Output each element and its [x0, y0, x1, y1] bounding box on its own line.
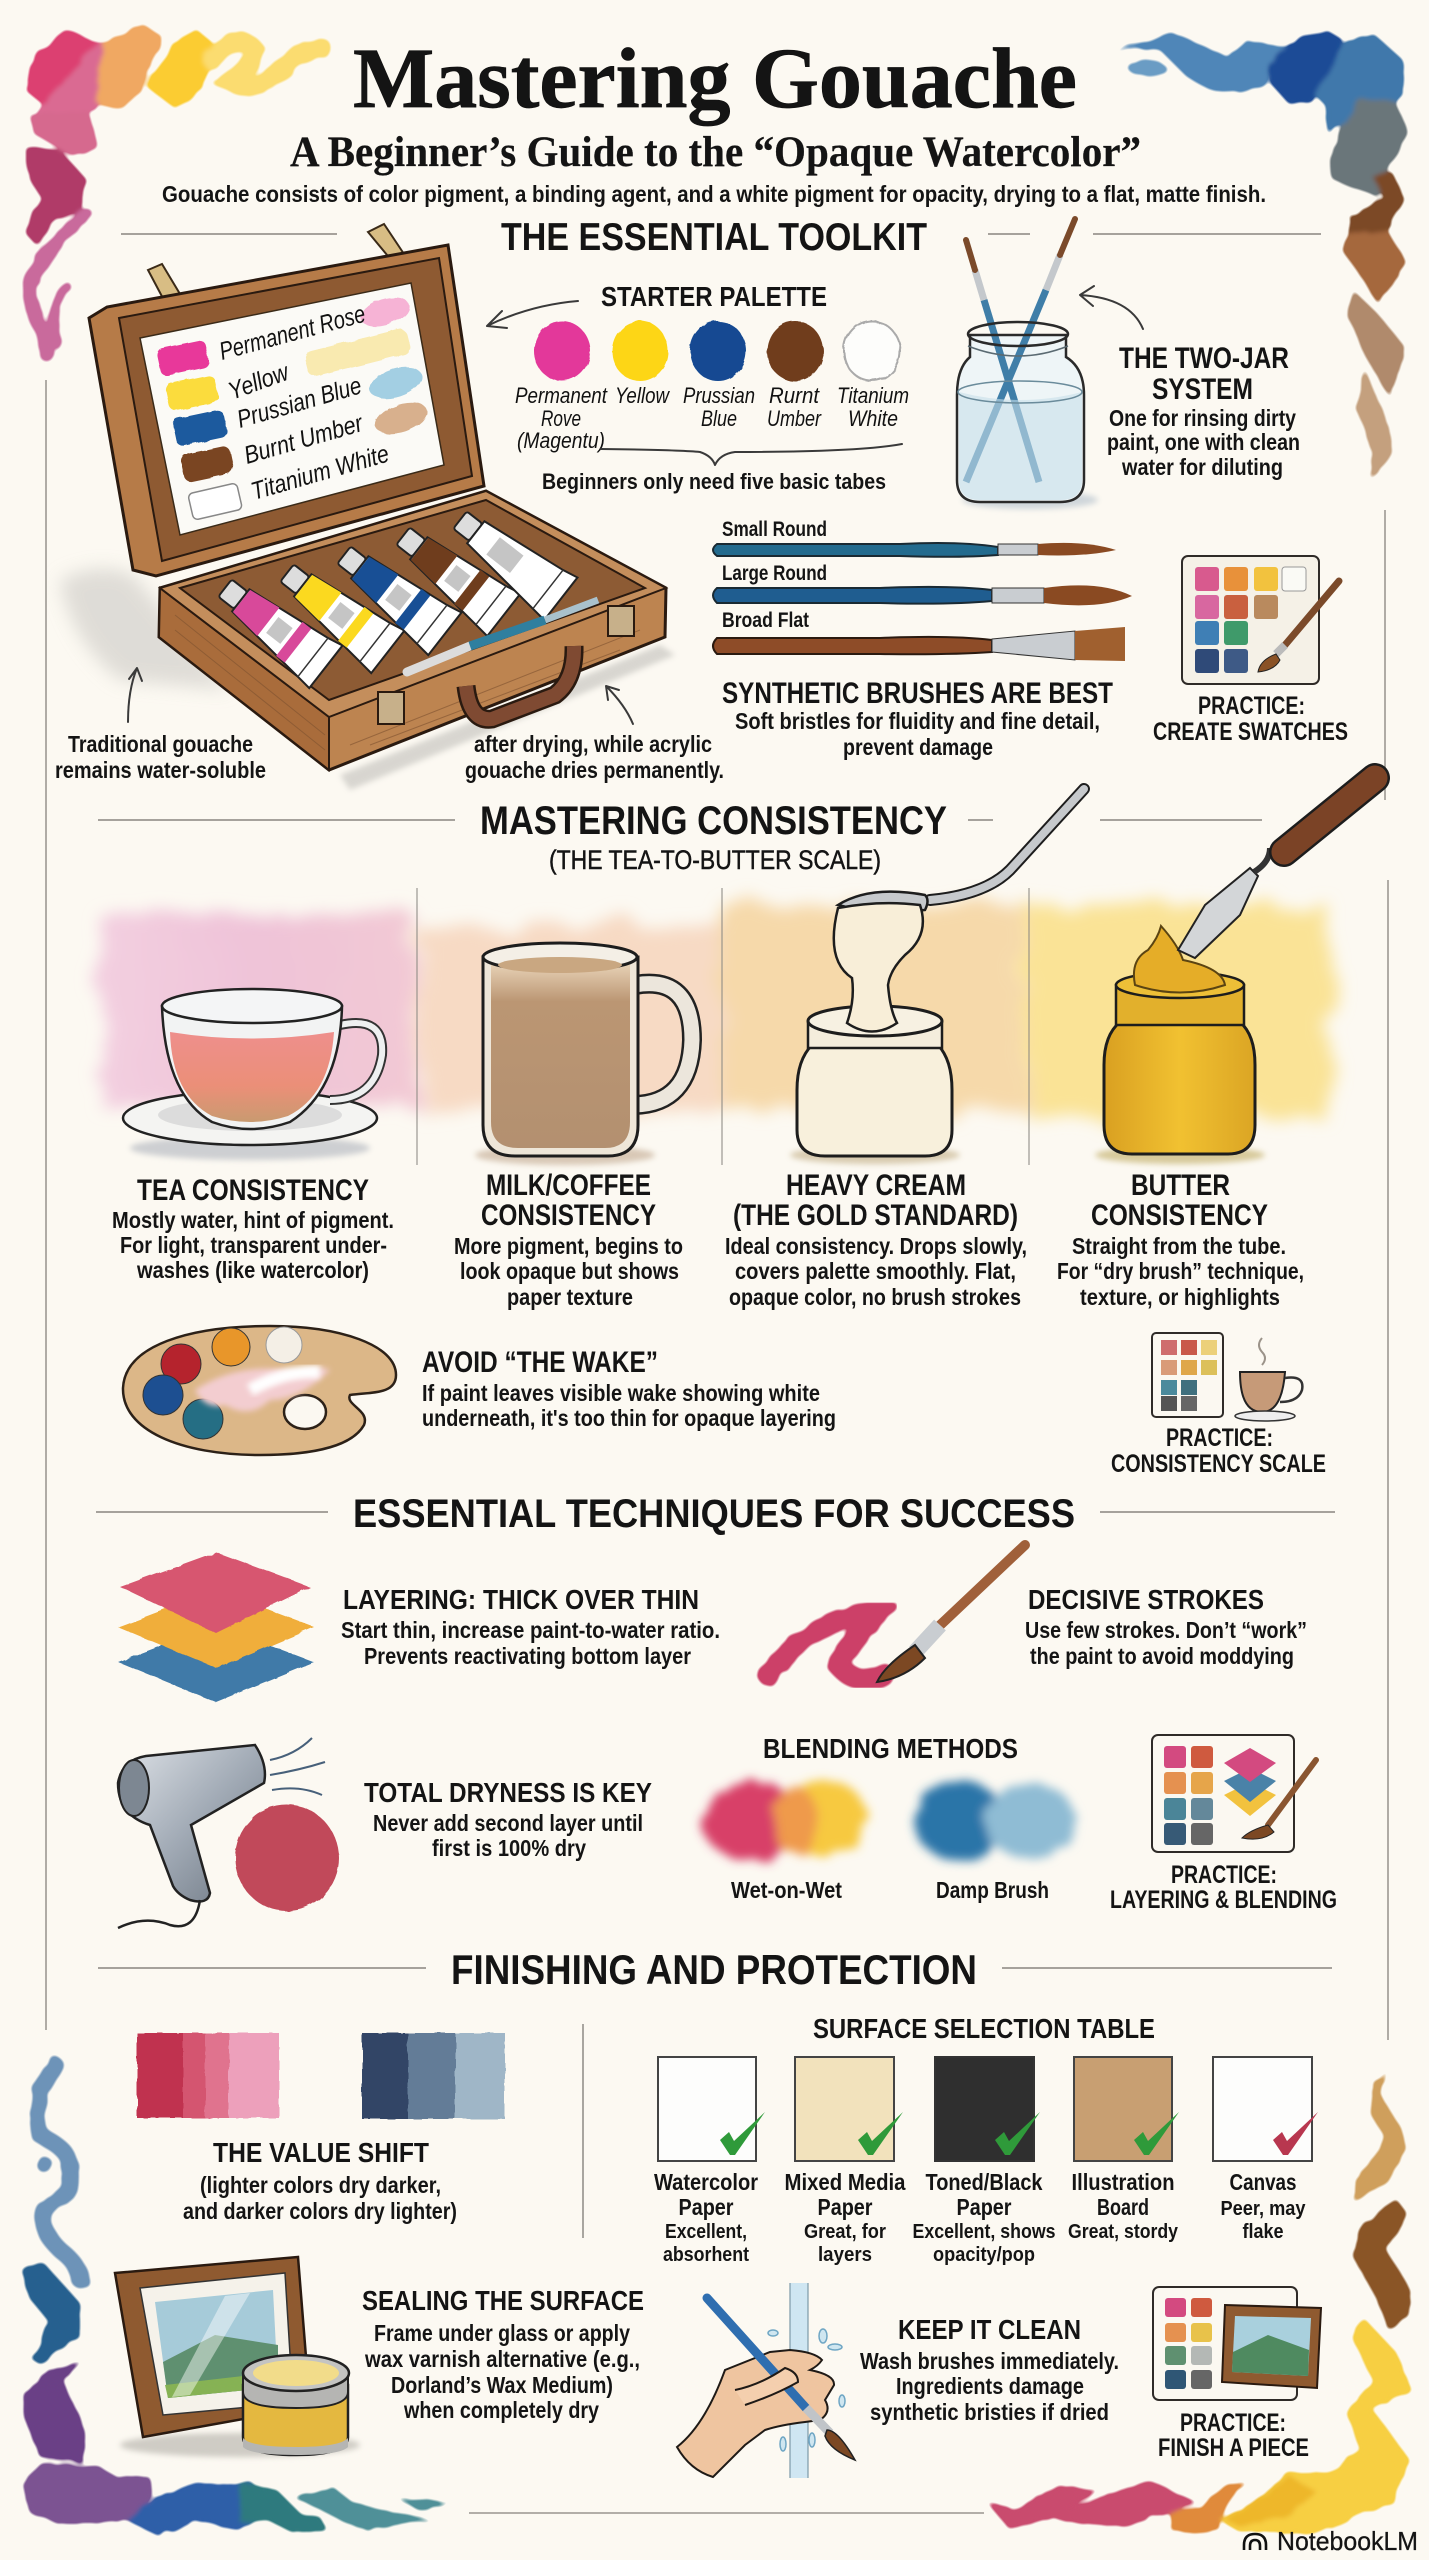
text: two-jar system: water for diluting: [1121, 454, 1283, 480]
page frame lines: [46, 380, 1388, 2513]
butter consistency text: BUTTER: [1131, 1169, 1230, 1202]
tea consistency text: washes (like watercolor): [136, 1257, 369, 1283]
swatch labels: Prussian: [683, 383, 755, 408]
logo: NotebookLM: NotebookLM: [1277, 2526, 1418, 2556]
heading: mastering consistency: MASTERING CONSISTENCY: [480, 799, 947, 843]
text: two-jar system: [1107, 342, 1300, 480]
heavy cream text: [725, 1169, 1027, 1310]
panel: essential techniques: [96, 1492, 1337, 1928]
text: decisive strokes: [1025, 1584, 1307, 1669]
brush labels and brushes: Broad Flat: [722, 609, 809, 632]
text: keep it clean: KEEP IT CLEAN: [898, 2314, 1081, 2345]
note: acrylic gouache: after drying, while acrylic: [474, 731, 712, 757]
milk/coffee consistency text: More pigment, begins to: [454, 1233, 683, 1259]
surface: illustration board: Board: [1097, 2194, 1149, 2220]
text: keep it clean: Wash brushes immediately.: [860, 2348, 1119, 2374]
note: acrylic gouache: [465, 731, 724, 783]
icon: layered diamonds: [118, 1552, 314, 1702]
text: two-jar system: THE TWO-JAR: [1119, 342, 1289, 375]
starter palette swatches: [534, 321, 900, 381]
surface: illustration board: Illustration: [1072, 2169, 1174, 2195]
icon: paint box with tubes: Prussian Blue: [234, 372, 365, 434]
swatch labels: Permanent: [515, 383, 608, 408]
note: traditional gouache: Traditional gouache: [68, 731, 253, 757]
text: layering: Prevents reactivating bottom layer: [364, 1643, 691, 1669]
surface: canvas: Peer, may: [1220, 2198, 1306, 2220]
surface: mixed media paper: Mixed Media: [784, 2169, 906, 2195]
heavy cream text: (THE GOLD STANDARD): [733, 1199, 1018, 1232]
title: Mastering Gouache: [353, 30, 1077, 126]
text: value shift: [183, 2137, 457, 2224]
paint tubes: [208, 499, 577, 688]
blending labels: Damp Brush: [936, 1877, 1049, 1903]
text: layering: [341, 1584, 720, 1669]
icon: framed painting and wax tin: [115, 2257, 360, 2457]
text: total dryness: TOTAL DRYNESS IS KEY: [364, 1777, 652, 1808]
heading: finishing and protection: FINISHING AND PROTECTION: [451, 1946, 977, 1993]
heading: essential techniques: ESSENTIAL TECHNIQUES FOR SUCCESS: [353, 1492, 1075, 1536]
heavy cream text: opaque color, no brush strokes: [729, 1284, 1021, 1310]
surface: canvas: flake: [1242, 2221, 1284, 2243]
surface: toned black paper: Excellent, shows: [912, 2221, 1056, 2243]
swatch labels: Blue: [701, 406, 737, 431]
milk/coffee consistency text: paper texture: [507, 1284, 633, 1310]
text: total dryness: [364, 1777, 652, 1861]
corner paint: top left: [25, 25, 322, 355]
milk/coffee consistency text: [454, 1169, 683, 1310]
surface: canvas: Canvas: [1230, 2169, 1296, 2195]
icon: two-jar water jar: [957, 219, 1098, 509]
text: sealing the surface: SEALING THE SURFACE: [362, 2285, 644, 2316]
note: traditional gouache: remains water-soluble: [55, 757, 266, 783]
intro text: Gouache consists of color pigment, a binding agent, and a white pigment for opacity, drying to a flat, matte finish.: [162, 181, 1266, 207]
text: layering: LAYERING: THICK OVER THIN: [343, 1584, 699, 1615]
icon: hand washing brush: [677, 2283, 855, 2478]
text: two-jar system: One for rinsing dirty: [1109, 405, 1296, 431]
surface: toned black paper: Paper: [956, 2194, 1012, 2220]
butter consistency text: CONSISTENCY: [1091, 1199, 1268, 1232]
note: acrylic gouache: gouache dries permanently.: [465, 757, 724, 783]
text: avoid the wake: AVOID “THE WAKE”: [422, 1346, 658, 1379]
practice: create swatches: PRACTICE:: [1198, 692, 1305, 720]
arrow left note: [128, 668, 142, 722]
heading: blending methods: BLENDING METHODS: [763, 1733, 1018, 1764]
surface: watercolor paper: [654, 2057, 765, 2266]
heavy cream text: covers palette smoothly. Flat,: [735, 1258, 1016, 1284]
icon: paint box with tubes: Titanium White: [248, 440, 392, 506]
text: two-jar system: paint, one with clean: [1107, 429, 1300, 455]
milk/coffee consistency text: look opaque but shows: [460, 1258, 679, 1284]
corner paint: top right: [1110, 30, 1408, 480]
text: decisive strokes: the paint to avoid moddying: [1030, 1643, 1294, 1669]
surface: watercolor paper: absorhent: [663, 2244, 749, 2266]
heading: the essential toolkit: THE ESSENTIAL TOOLKIT: [501, 216, 927, 259]
icon: paint box with tubes: Yellow: [224, 358, 294, 406]
corner paint: bottom right: [985, 2072, 1412, 2533]
text: two-jar system: SYSTEM: [1152, 373, 1253, 406]
blending labels: Wet-on-Wet: [731, 1877, 842, 1903]
text: sealing the surface: [362, 2285, 644, 2423]
heading: mastering consistency: (THE TEA-TO-BUTTER SCALE): [549, 845, 881, 875]
icon: hair dryer: [118, 1738, 339, 1928]
practice: layering and blending: [1110, 1735, 1337, 1914]
text: keep it clean: Ingredients damage: [896, 2373, 1084, 2399]
surface table: [654, 2057, 1318, 2266]
swatch labels: Rurnt: [769, 383, 820, 408]
arrow right note: [606, 686, 633, 724]
text: sealing the surface: Frame under glass or apply: [374, 2320, 630, 2346]
surface: watercolor paper: Watercolor: [654, 2169, 758, 2195]
text: synthetic brushes: [722, 677, 1113, 760]
practice: layering and blending: PRACTICE:: [1171, 1861, 1277, 1889]
text: total dryness: first is 100% dry: [432, 1835, 586, 1861]
text: synthetic brushes: SYNTHETIC BRUSHES ARE BEST: [722, 677, 1113, 710]
practice: finish a piece: FINISH A PIECE: [1158, 2434, 1309, 2462]
heading: starter palette: STARTER PALETTE: [601, 281, 827, 312]
text: value shift: and darker colors dry lighter): [183, 2198, 457, 2224]
icon: heavy cream jar and spoon: [790, 789, 1084, 1164]
surface: mixed media paper: layers: [818, 2244, 872, 2266]
note: five tubes: Beginners only need five basic tabes: [542, 469, 886, 494]
text: synthetic brushes: prevent damage: [843, 734, 993, 760]
practice: create swatches: [1153, 556, 1348, 746]
text: decisive strokes: DECISIVE STROKES: [1028, 1584, 1264, 1615]
practice: create swatches: CREATE SWATCHES: [1153, 718, 1348, 746]
icon: paint box with tubes: [60, 224, 675, 790]
text: sealing the surface: Dorland’s Wax Medium): [391, 2372, 613, 2398]
tea consistency text: [112, 1174, 394, 1283]
text: sealing the surface: wax varnish alternative (e.g.,: [364, 2346, 640, 2372]
brace under swatches: [601, 444, 902, 465]
swatch labels: Umber: [767, 406, 822, 431]
tea consistency text: TEA CONSISTENCY: [137, 1174, 369, 1207]
watercolor washes: [100, 905, 1330, 1120]
blending labels: [731, 1877, 1049, 1903]
surface: mixed media paper: Paper: [818, 2194, 873, 2220]
text: avoid the wake: underneath, it's too thin for opaque layering: [422, 1405, 836, 1431]
surface: toned black paper: [912, 2057, 1056, 2266]
text: avoid the wake: If paint leaves visible wake showing white: [422, 1380, 820, 1406]
tea consistency text: For light, transparent under-: [120, 1232, 387, 1258]
surface: illustration board: Great, stordy: [1068, 2221, 1179, 2243]
text: keep it clean: synthetic bristies if dried: [870, 2399, 1109, 2425]
heavy cream text: HEAVY CREAM: [786, 1169, 966, 1202]
icon: decisive brush stroke: [768, 1545, 1025, 1682]
brush labels and brushes: Large Round: [722, 562, 827, 585]
tea consistency text: Mostly water, hint of pigment.: [112, 1207, 394, 1233]
text: decisive strokes: Use few strokes. Don’t “work”: [1025, 1617, 1307, 1643]
icon: tea cup: [123, 989, 382, 1160]
brush labels and brushes: Small Round: [722, 518, 827, 541]
butter consistency text: For “dry brush” technique,: [1057, 1258, 1304, 1284]
swatch labels: Titanium: [837, 383, 909, 408]
heading: mastering consistency: [98, 799, 1262, 875]
swatch labels: White: [848, 406, 898, 431]
practice: consistency scale: CONSISTENCY SCALE: [1111, 1450, 1326, 1478]
panel: essential toolkit: [55, 216, 1348, 790]
butter consistency text: Straight from the tube.: [1072, 1233, 1286, 1259]
icon: butter jar and palette knife: [1095, 778, 1375, 1164]
heavy cream text: Ideal consistency. Drops slowly,: [725, 1233, 1027, 1259]
milk/coffee consistency text: CONSISTENCY: [481, 1199, 656, 1232]
text: value shift: (lighter colors dry darker,: [200, 2172, 441, 2198]
corner paint: bottom left: [22, 2065, 453, 2537]
surface: mixed media paper: [784, 2057, 906, 2266]
icon: wooden palette: [123, 1326, 396, 1455]
arrow to starter palette: [487, 301, 578, 328]
practice: finish a piece: [1153, 2287, 1321, 2462]
swatch labels: Rove: [541, 406, 581, 431]
swatch labels: (Magentu): [517, 428, 605, 453]
arrow to jar: [1080, 286, 1143, 329]
surface: toned black paper: opacity/pop: [933, 2244, 1035, 2266]
practice: consistency scale: PRACTICE:: [1166, 1424, 1273, 1452]
brush labels and brushes: [713, 518, 1132, 661]
text: value shift: THE VALUE SHIFT: [213, 2137, 429, 2168]
practice: finish a piece: PRACTICE:: [1180, 2409, 1286, 2437]
swatch labels: [515, 383, 909, 453]
heading: surface selection table: SURFACE SELECTION TABLE: [813, 2013, 1155, 2044]
icon: paint box with tubes: Burnt Umber: [241, 409, 367, 470]
practice: consistency scale: [1111, 1333, 1326, 1478]
value shift swatches: [137, 2033, 505, 2119]
surface: illustration board: [1068, 2057, 1179, 2243]
milk/coffee consistency text: MILK/COFFEE: [486, 1169, 651, 1202]
text: layering: Start thin, increase paint-to-water ratio.: [341, 1617, 720, 1643]
panel: finishing and protection: [98, 1946, 1332, 2478]
butter consistency text: [1057, 1169, 1304, 1310]
text: sealing the surface: when completely dry: [403, 2397, 599, 2423]
note: traditional gouache: [55, 731, 266, 783]
surface: toned black paper: Toned/Black: [926, 2169, 1043, 2195]
swatch labels: Yellow: [615, 383, 671, 408]
surface: watercolor paper: Paper: [678, 2194, 734, 2220]
text: synthetic brushes: Soft bristles for fluidity and fine detail,: [735, 708, 1100, 734]
icon: paint box with tubes: Permanent Rose: [216, 300, 368, 366]
surface: watercolor paper: Excellent,: [665, 2221, 747, 2243]
text: keep it clean: [860, 2314, 1119, 2425]
panel: mastering consistency: [98, 778, 1375, 1478]
butter consistency text: texture, or highlights: [1080, 1284, 1280, 1310]
surface: mixed media paper: Great, for: [804, 2221, 886, 2243]
subtitle: A Beginner’s Guide to the “Opaque Watercolor”: [290, 129, 1141, 176]
surface: canvas: [1213, 2057, 1318, 2243]
practice: layering and blending: LAYERING & BLENDING: [1110, 1886, 1337, 1914]
blending swatches: [702, 1780, 1076, 1861]
icon: coffee mug: [475, 943, 692, 1165]
text: total dryness: Never add second layer until: [373, 1810, 643, 1836]
text: avoid the wake: [422, 1346, 836, 1431]
